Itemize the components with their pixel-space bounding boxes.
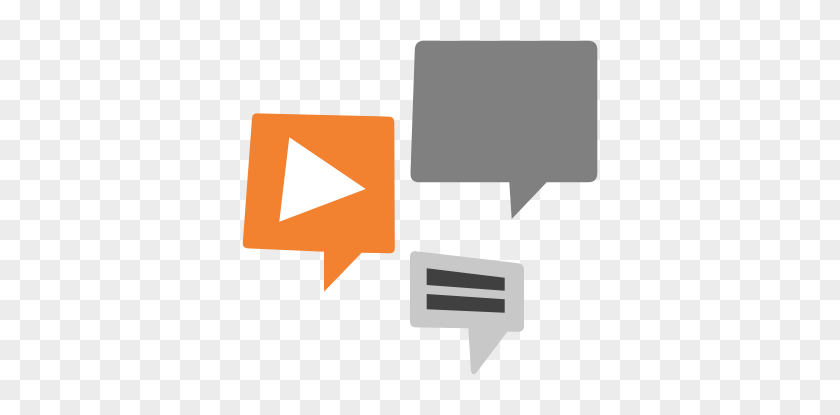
icon: orange speech bubble with play symbol — [243, 113, 395, 292]
light grey bubble body — [410, 251, 524, 374]
icon: large grey speech bubble — [410, 41, 597, 219]
icon: light grey speech bubble with text lines — [410, 251, 524, 374]
lower dark text line — [427, 294, 505, 313]
orange bubble body — [243, 113, 395, 292]
white play triangle — [279, 137, 366, 222]
upper dark text line — [427, 268, 505, 291]
